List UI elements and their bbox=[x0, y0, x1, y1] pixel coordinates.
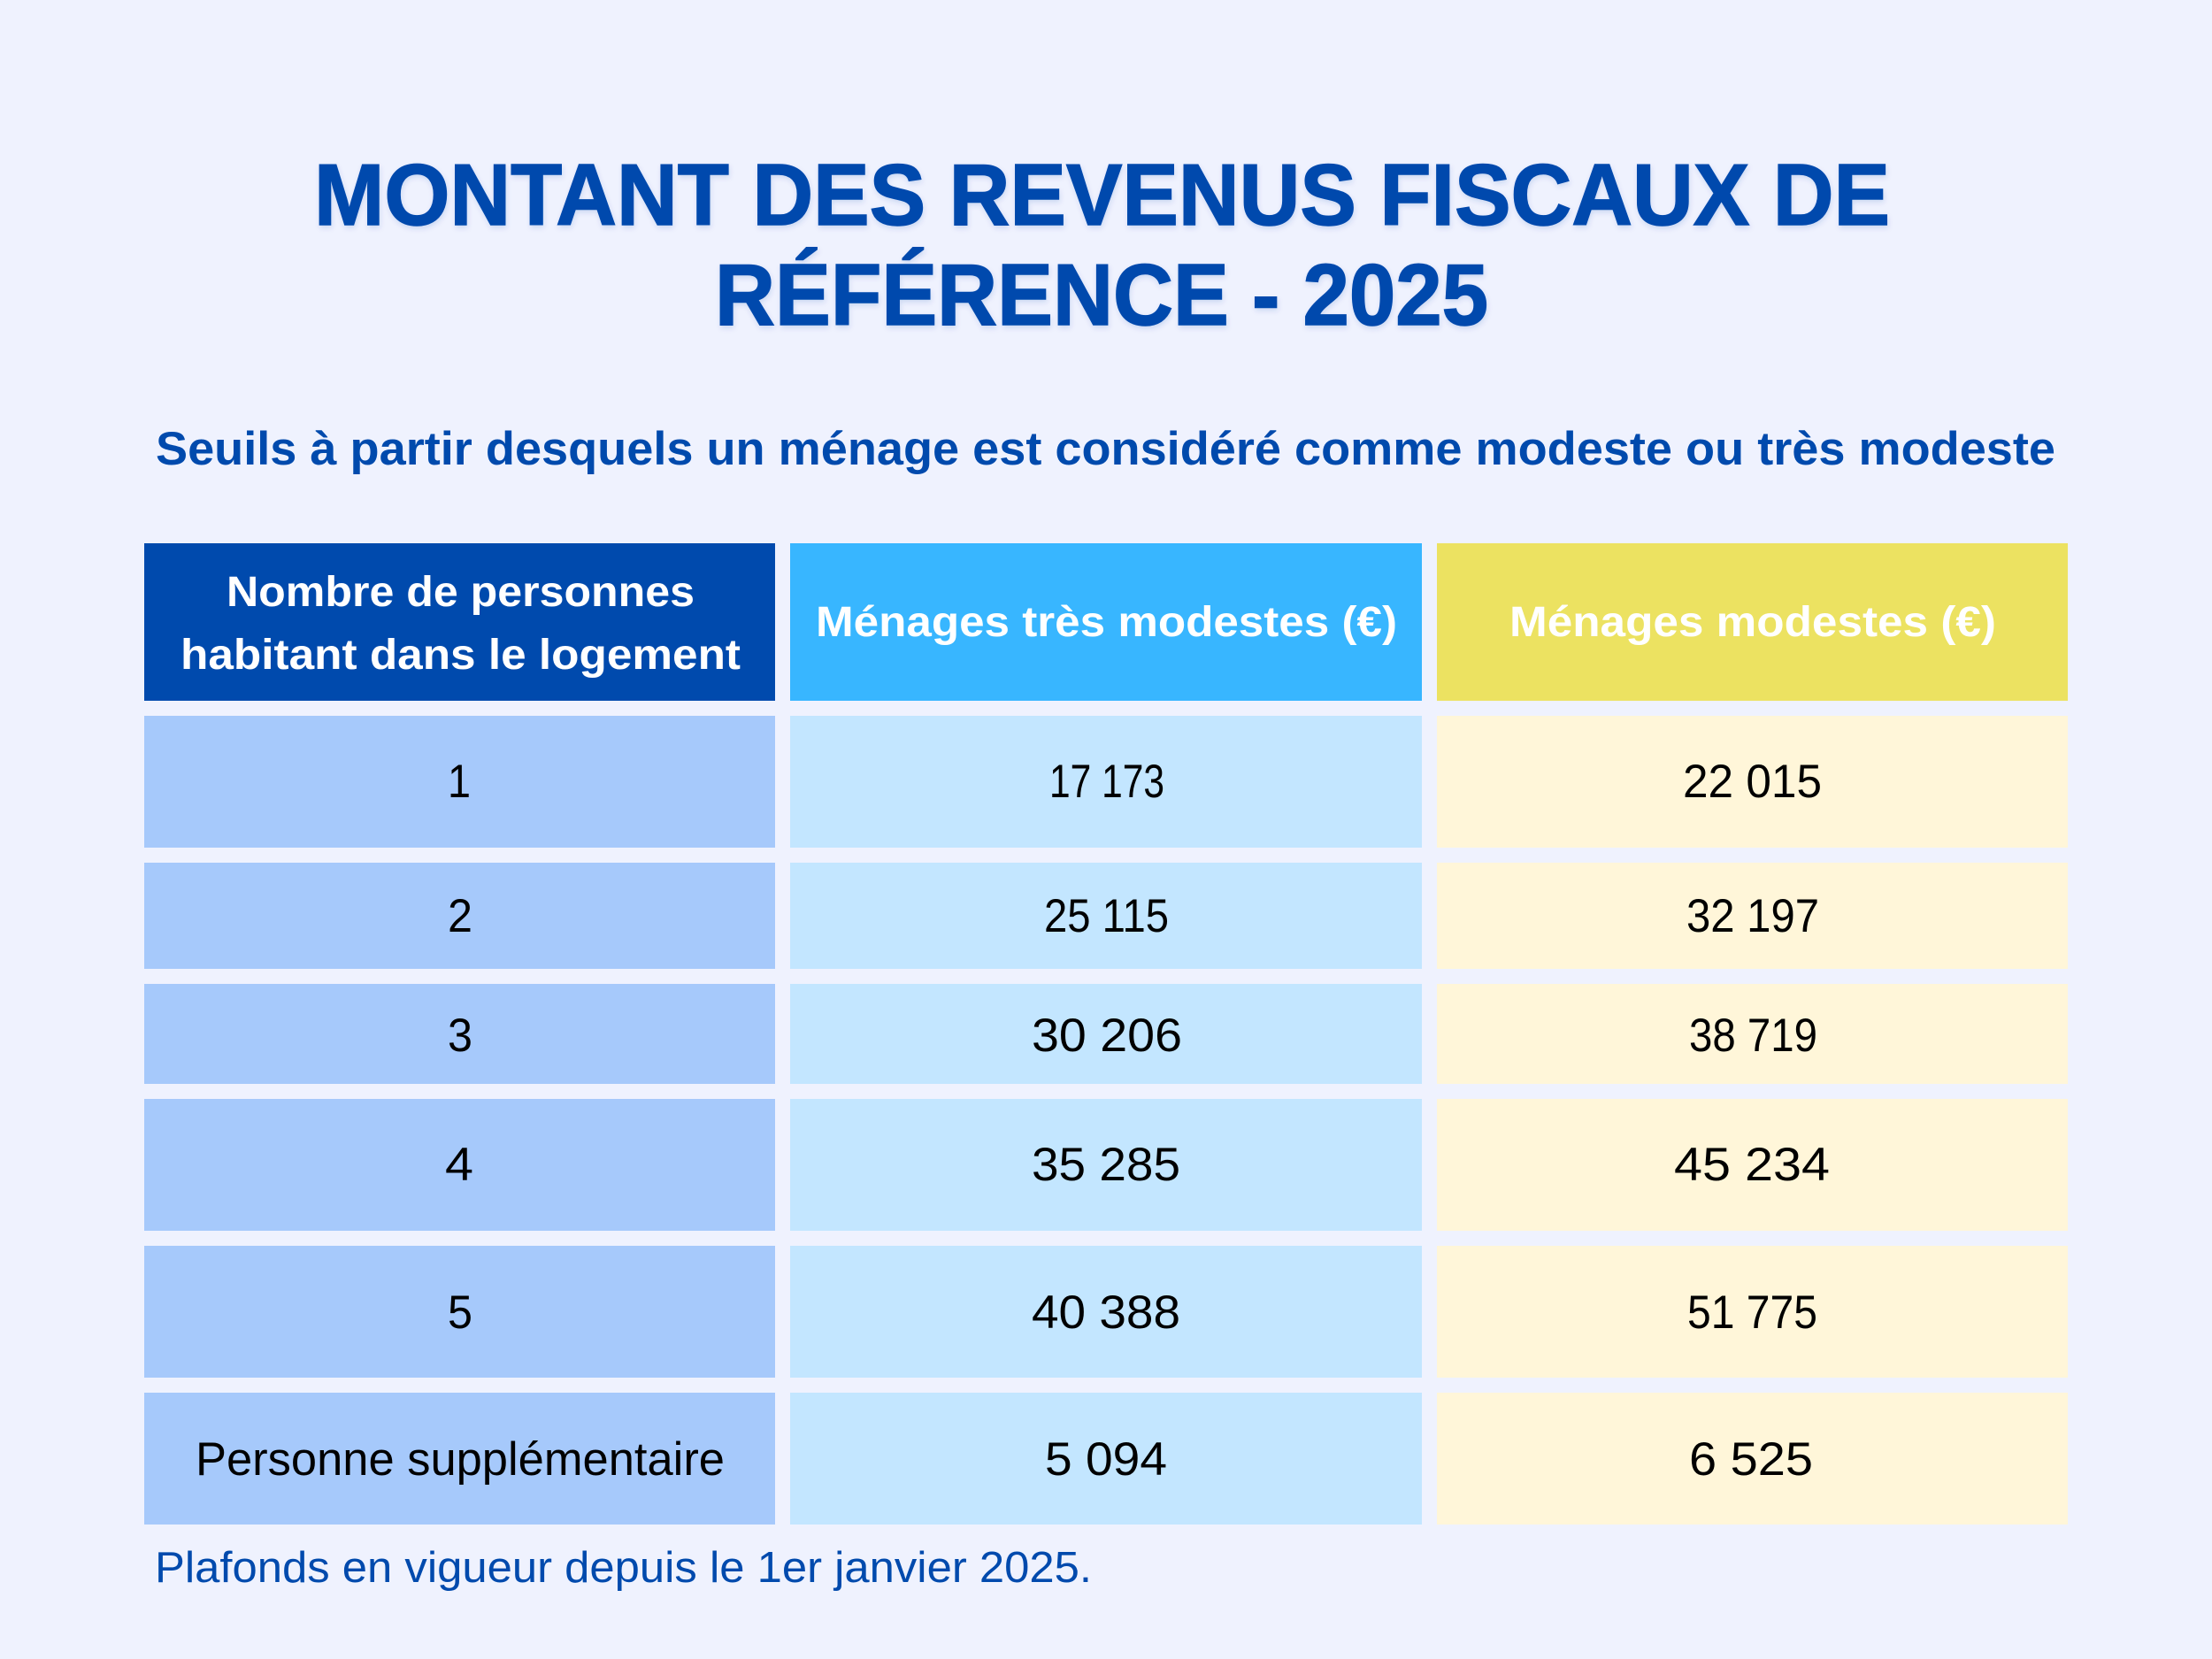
row 4: 45 234 bbox=[1674, 1139, 1830, 1191]
row 3 bbox=[144, 984, 2068, 1084]
row 1: 17 173 bbox=[1049, 756, 1164, 808]
row 3: 3 bbox=[448, 1010, 472, 1062]
row: additional person bbox=[144, 1393, 2068, 1525]
header: modest households: Ménages modestes (€) bbox=[1509, 599, 1996, 646]
row: additional person: Personne supplémentaire bbox=[196, 1433, 725, 1486]
row 1: 1 bbox=[448, 756, 471, 808]
subtitle: Seuils à partir desquels un ménage est considéré comme modeste ou très modeste bbox=[156, 423, 2055, 475]
row 4: 35 285 bbox=[1032, 1139, 1180, 1191]
row 5: 5 bbox=[448, 1286, 472, 1339]
table bbox=[144, 543, 2068, 1525]
row 1 bbox=[144, 716, 2068, 848]
header: modest households bbox=[1437, 543, 2068, 701]
row 1: 22 015 bbox=[1683, 756, 1822, 808]
row 5 bbox=[144, 1246, 2068, 1378]
row: additional person: 5 094 bbox=[1045, 1433, 1167, 1486]
row 4 bbox=[144, 1099, 2068, 1231]
row 4: 4 bbox=[445, 1139, 473, 1191]
row 5: 40 388 bbox=[1032, 1286, 1180, 1339]
header: number of people bbox=[144, 543, 775, 701]
header: number of people: habitant dans le logement bbox=[180, 632, 741, 679]
header: number of people: Nombre de personnes bbox=[227, 569, 695, 616]
header: very modest households bbox=[790, 543, 1422, 701]
row 5: 51 775 bbox=[1687, 1286, 1817, 1339]
row 3: 30 206 bbox=[1032, 1010, 1182, 1062]
title bbox=[314, 146, 1890, 343]
row 3: 38 719 bbox=[1689, 1010, 1817, 1062]
title: MONTANT DES REVENUS FISCAUX DE bbox=[314, 146, 1890, 243]
row 2: 32 197 bbox=[1686, 890, 1819, 942]
row 2 bbox=[144, 863, 2068, 969]
header: very modest households: Ménages très modestes (€) bbox=[816, 599, 1397, 646]
row: additional person: 6 525 bbox=[1689, 1433, 1813, 1486]
row 2: 2 bbox=[448, 890, 472, 942]
row 2: 25 115 bbox=[1044, 890, 1169, 942]
footnote: Plafonds en vigueur depuis le 1er janvier 2025. bbox=[155, 1544, 1092, 1592]
title: RÉFÉRENCE - 2025 bbox=[715, 246, 1488, 343]
